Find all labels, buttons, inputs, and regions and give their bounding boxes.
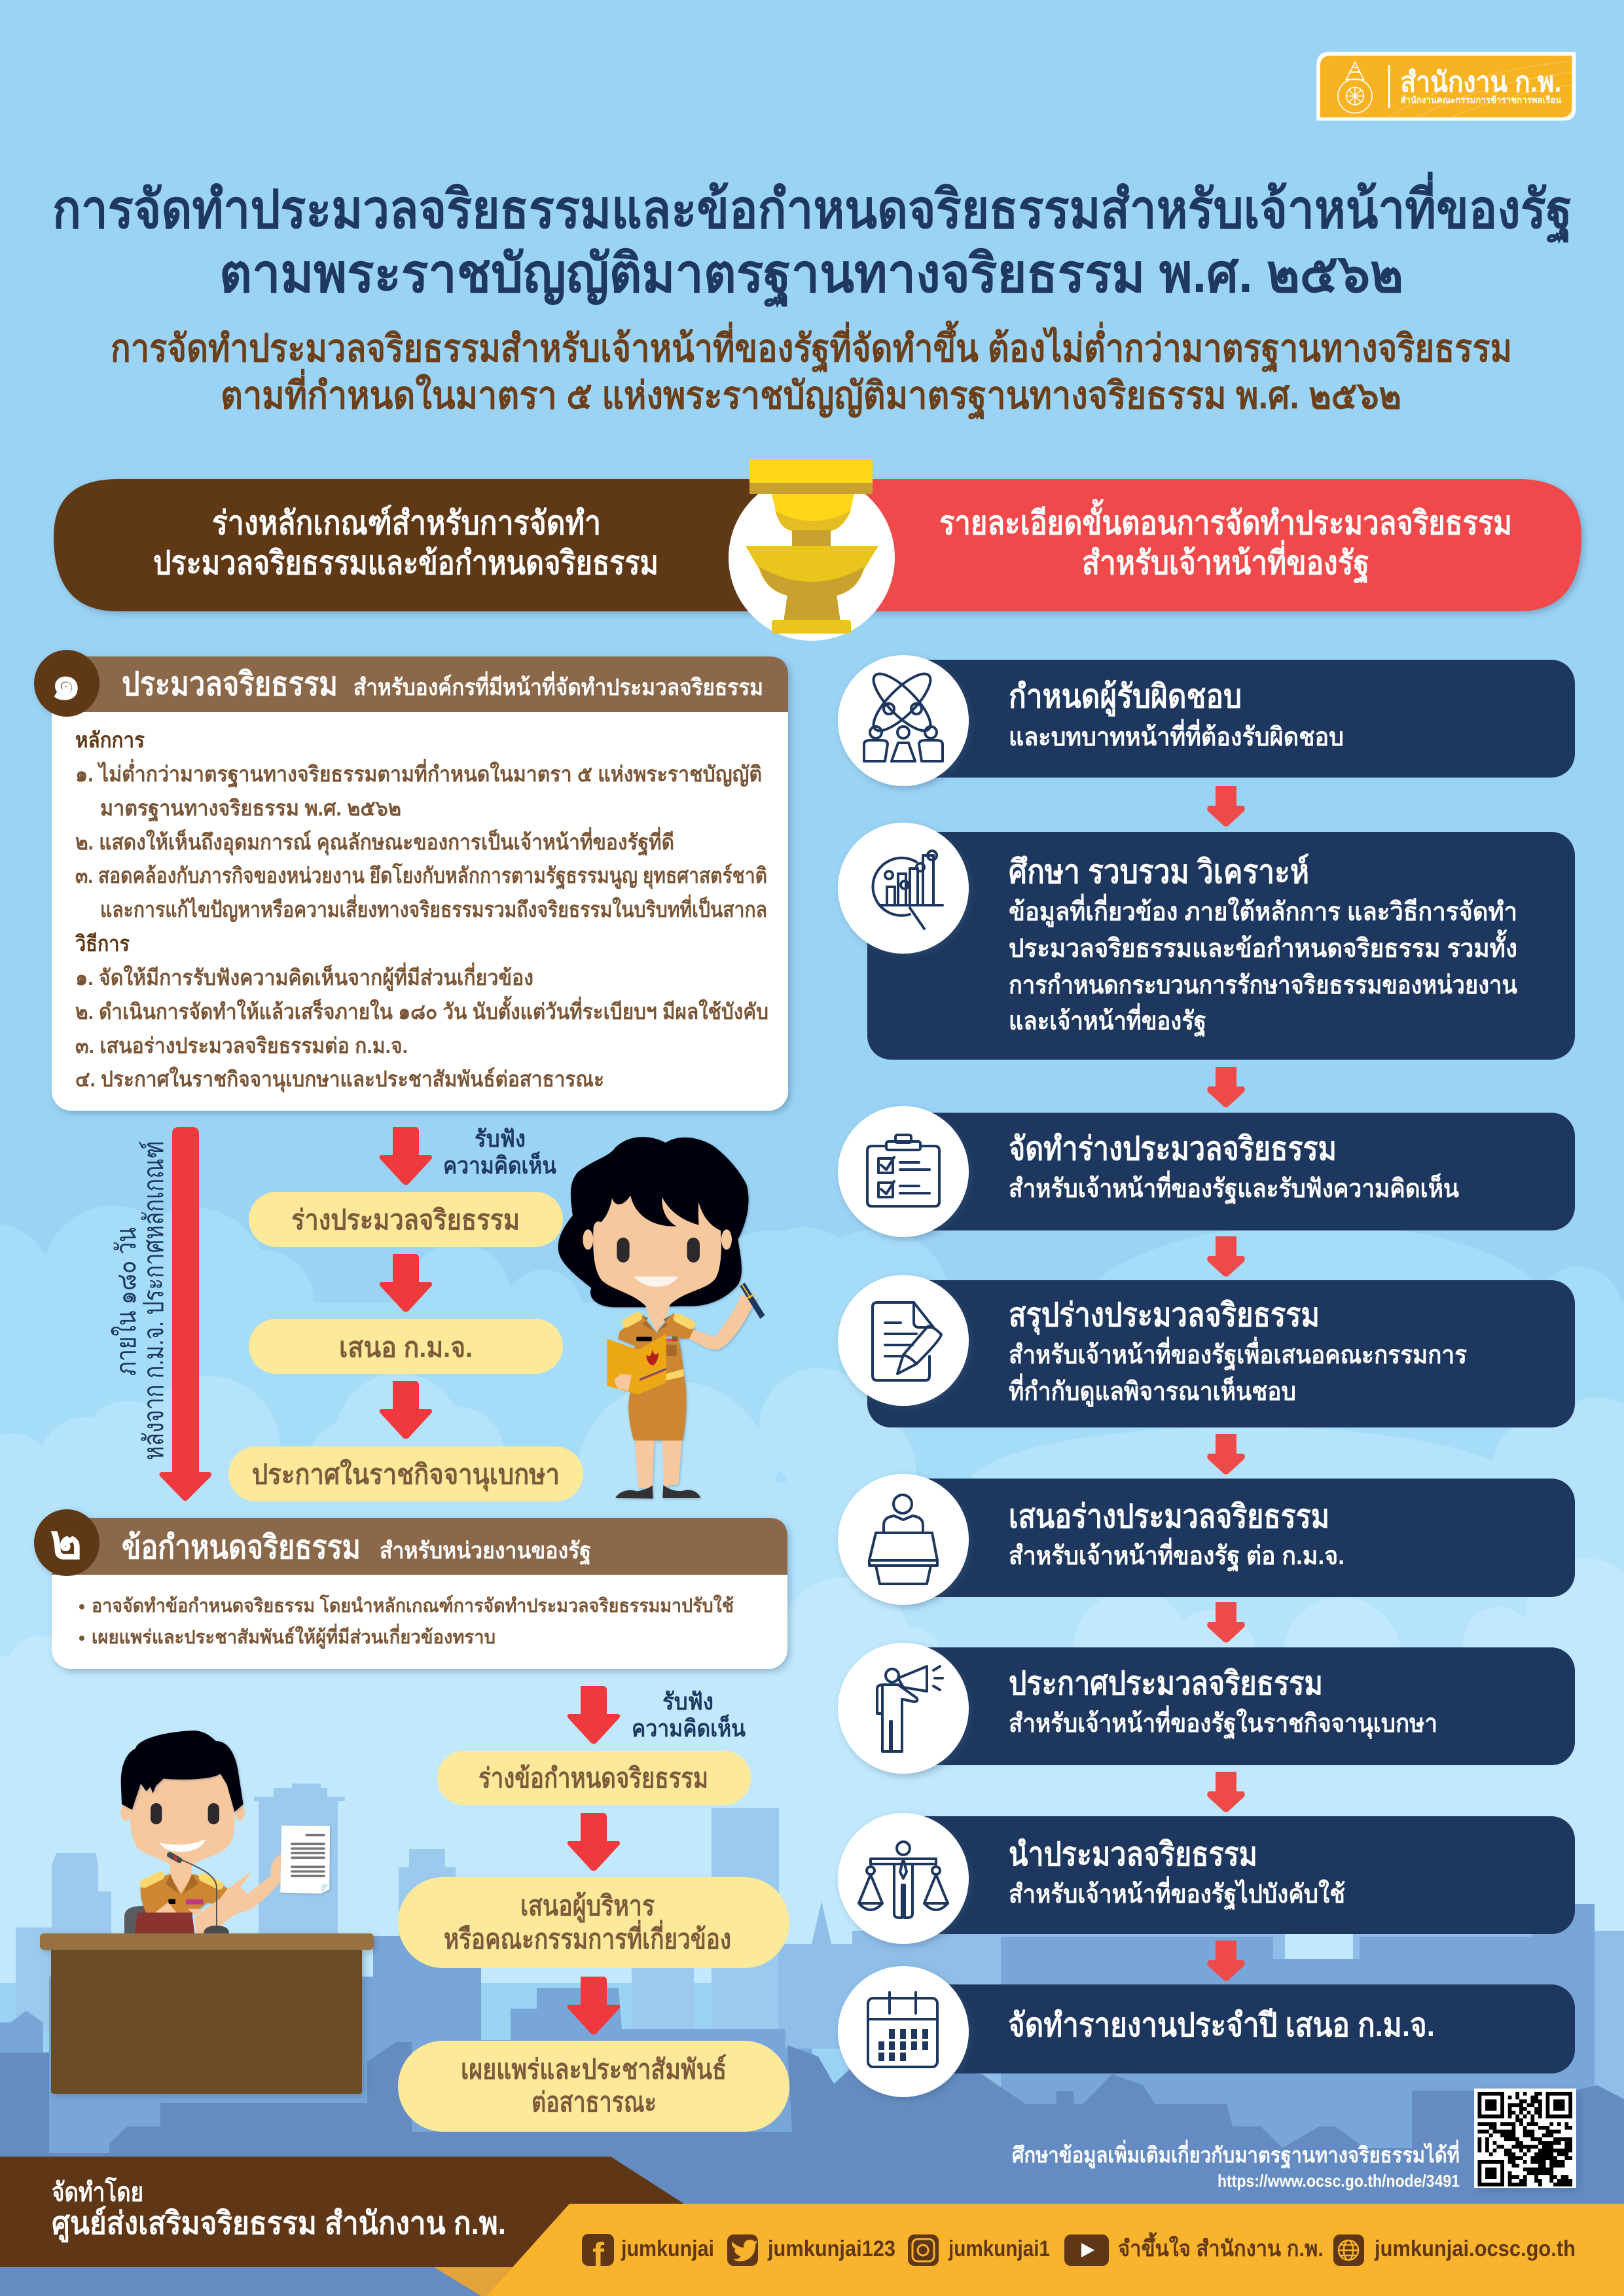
section 1 body: ๒. แสดงให้เห็นถึงอุดมการณ์ คุณลักษณะของการเป็นเจ้าหน้าที่ของรัฐที่ดี bbox=[75, 827, 674, 856]
section 1 body: หลักการ bbox=[75, 728, 145, 752]
step 3 text: จัดทำร่างประมวลจริยธรรม bbox=[1009, 1130, 1337, 1167]
flow 2 pill: draft bbox=[437, 1751, 751, 1805]
timeline vertical label: ภายใน ๑๘๐ วัน bbox=[111, 1227, 141, 1376]
step 8 text: จัดทำรายงานประจำปี เสนอ ก.ม.จ. bbox=[1008, 2007, 1435, 2043]
section 1 body: และการแก้ไขปัญหาหรือความเสี่ยงทางจริยธรรมรวมถึงจริยธรรมในบริบทที่เป็นสากล bbox=[100, 894, 767, 922]
label: public hearing 1: ความคิดเห็น bbox=[443, 1151, 556, 1179]
step 8 icon bbox=[838, 1966, 969, 2097]
section 1 number badge: ๑ bbox=[51, 655, 81, 709]
logo wordmark: สำนักงาน ก.พ. bbox=[1400, 67, 1561, 98]
flow 1 pill: draft bbox=[249, 1192, 563, 1247]
step 3 card: สำหรับเจ้าหน้าที่ของรัฐและรับฟังความคิดเห็น bbox=[1009, 1170, 1459, 1205]
timeline long arrow bbox=[159, 1127, 211, 1501]
icon: golden tray center bbox=[729, 459, 895, 641]
label: public hearing 2: รับฟัง bbox=[662, 1688, 713, 1715]
organizer text: ศูนย์ส่งเสริมจริยธรรม สำนักงาน ก.พ. bbox=[52, 2206, 506, 2243]
step 5 icon bbox=[838, 1474, 969, 1605]
step 1 text: กำหนดผู้รับผิดชอบ bbox=[1009, 678, 1242, 717]
flow 2 pill: publish: ต่อสาธารณะ bbox=[532, 2087, 657, 2117]
step 7 text: นำประมวลจริยธรรม bbox=[1009, 1836, 1257, 1873]
label: public hearing 2: ความคิดเห็น bbox=[632, 1713, 746, 1742]
flow 1 pill: gazette bbox=[228, 1446, 583, 1501]
label: public hearing 1: รับฟัง bbox=[475, 1125, 526, 1152]
step 3 card bbox=[838, 1106, 1575, 1237]
section 1 body: ๓. เสนอร่างประมวลจริยธรรมต่อ ก.ม.จ. bbox=[75, 1033, 408, 1058]
section 2 bullets: อาจจัดทำข้อกำหนดจริยธรรม โดยนำหลักเกณฑ์การจัดทำประมวลจริยธรรมมาปรับใช้ bbox=[92, 1594, 734, 1617]
organizer text: จัดทำโดย bbox=[52, 2177, 143, 2207]
section 2 bullets: เผยแพร่และประชาสัมพันธ์ให้ผู้ที่มีส่วนเกี่ยวข้องทราบ bbox=[92, 1623, 496, 1649]
step 5 text: เสนอร่างประมวลจริยธรรม bbox=[1009, 1498, 1329, 1535]
step 6 card bbox=[838, 1643, 1575, 1774]
logo OCSC bbox=[1316, 52, 1576, 120]
banner: right red bbox=[812, 479, 1581, 611]
footer: orange band bbox=[486, 2204, 1624, 2296]
arrow 1 to 2 bbox=[1207, 786, 1245, 826]
background clouds bbox=[0, 1206, 1624, 1983]
more information text: https://www.ocsc.go.th/node/3491 bbox=[1218, 2171, 1460, 2191]
step 2 card bbox=[838, 823, 1575, 1060]
subtitle bbox=[111, 321, 1512, 420]
social: website bbox=[1333, 2234, 1576, 2266]
panel: section 2 bbox=[34, 1509, 787, 1669]
illustration: woman officer bbox=[558, 1137, 763, 1499]
section 1 number badge bbox=[34, 650, 99, 717]
logo emblem bbox=[1338, 62, 1372, 113]
step 5 card bbox=[838, 1474, 1575, 1605]
label: public hearing 2 bbox=[632, 1688, 746, 1742]
flow 2 pill: executive: เสนอผู้บริหาร bbox=[520, 1890, 655, 1923]
panel: section 1 bbox=[34, 650, 788, 1111]
banner: left brown bbox=[54, 479, 812, 611]
step 4 icon bbox=[838, 1275, 969, 1406]
step 2 card: และเจ้าหน้าที่ของรัฐ bbox=[1009, 1003, 1206, 1037]
section 1 body: ๑. จัดให้มีการรับฟังความคิดเห็นจากผู้ที่มีส่วนเกี่ยวข้อง bbox=[75, 962, 533, 992]
section 1 body: ๒. ดำเนินการจัดทำให้แล้วเสร็จภายใน ๑๘๐ วัน นับตั้งแต่วันที่ระเบียบฯ มีผลใช้บังคับ bbox=[75, 996, 768, 1024]
banner left text: ร่างหลักเกณฑ์สำหรับการจัดทำ bbox=[212, 505, 601, 541]
background city skyline bbox=[0, 1784, 1624, 2296]
social: instagram: jumkunjai1 bbox=[948, 2236, 1050, 2261]
social: facebook bbox=[582, 2234, 714, 2275]
timeline vertical label: หลังจาก ก.ม.จ. ประกาศหลักเกณฑ์ bbox=[138, 1141, 169, 1460]
section 2 bullets bbox=[79, 1594, 734, 1649]
step 7 card bbox=[838, 1813, 1575, 1944]
QR code bbox=[1474, 2089, 1576, 2188]
social: facebook: jumkunjai bbox=[621, 2236, 714, 2261]
section 1 body: ๑. ไม่ต่ำกว่ามาตรฐานทางจริยธรรมตามที่กำหนดในมาตรา ๕ แห่งพระราชบัญญัติ bbox=[75, 759, 762, 788]
arrow 7 to 8 bbox=[1207, 1941, 1245, 1981]
step 6 card: สำหรับเจ้าหน้าที่ของรัฐในราชกิจจานุเบกษา bbox=[1009, 1705, 1437, 1740]
arrow 2 to 3 bbox=[1207, 1067, 1245, 1107]
flow 1 pill: propose: เสนอ ก.ม.จ. bbox=[339, 1332, 473, 1363]
social: instagram bbox=[908, 2234, 1050, 2266]
section 2 heading: ข้อกำหนดจริยธรรม bbox=[122, 1529, 361, 1566]
section 2 number badge: ๒ bbox=[50, 1515, 82, 1569]
step 2 text: ศึกษา รวบรวม วิเคราะห์ bbox=[1009, 853, 1309, 890]
timeline vertical label bbox=[111, 1141, 169, 1460]
title: ตามพระราชบัญญัติมาตรฐานทางจริยธรรม พ.ศ. ๒๕๖๒ bbox=[219, 244, 1403, 309]
step 6 text: ประกาศประมวลจริยธรรม bbox=[1009, 1665, 1323, 1702]
section 2 subheading: สำหรับหน่วยงานของรัฐ bbox=[380, 1538, 591, 1566]
step 8 card bbox=[838, 1966, 1575, 2097]
flow 1 arrows bbox=[380, 1127, 432, 1439]
banner left text: ประมวลจริยธรรมและข้อกำหนดจริยธรรม bbox=[153, 545, 659, 581]
section 1 body: มาตรฐานทางจริยธรรม พ.ศ. ๒๕๖๒ bbox=[100, 796, 401, 822]
banner right text: สำหรับเจ้าหน้าที่ของรัฐ bbox=[1082, 540, 1369, 584]
banner right text: รายละเอียดขั้นตอนการจัดทำประมวลจริยธรรม bbox=[939, 499, 1512, 541]
footer: dark orange fold bbox=[434, 2267, 513, 2296]
social: twitter: jumkunjai123 bbox=[767, 2236, 895, 2261]
flow 2 pill: executive: หรือคณะกรรมการที่เกี่ยวข้อง bbox=[444, 1920, 731, 1954]
arrow 6 to 7 bbox=[1207, 1772, 1245, 1812]
section 1 heading: ประมวลจริยธรรม bbox=[122, 666, 338, 702]
step 7 card: สำหรับเจ้าหน้าที่ของรัฐไปบังคับใช้ bbox=[1009, 1876, 1345, 1910]
arrow 3 to 4 bbox=[1207, 1236, 1245, 1276]
banner left text bbox=[153, 505, 659, 581]
step 4 text: สรุปร่างประมวลจริยธรรม bbox=[1009, 1297, 1320, 1335]
flow 2 arrows bbox=[568, 1686, 620, 2034]
desk bbox=[40, 1933, 374, 2094]
social: youtube bbox=[1064, 2232, 1324, 2266]
step 1 icon bbox=[838, 655, 969, 786]
step 3 icon bbox=[838, 1106, 969, 1237]
step 1 card: และบทบาทหน้าที่ที่ต้องรับผิดชอบ bbox=[1009, 719, 1344, 751]
section 1 body: ๓. สอดคล้องกับภารกิจของหน่วยงาน ยึดโยงกับหลักการตามรัฐธรรมนูญ ยุทธศาสตร์ชาติ bbox=[75, 863, 767, 889]
footer: brown organizer band bbox=[0, 2157, 684, 2267]
section 2 header bbox=[52, 1518, 787, 1575]
step 4 card bbox=[838, 1275, 1575, 1427]
flow 1 pill: draft: ร่างประมวลจริยธรรม bbox=[291, 1204, 520, 1235]
flow 1 pill: gazette: ประกาศในราชกิจจานุเบกษา bbox=[252, 1458, 560, 1492]
flow 2 pill: publish: เผยแพร่และประชาสัมพันธ์ bbox=[461, 2054, 727, 2085]
arrow 4 to 5 bbox=[1207, 1434, 1245, 1474]
step 7 icon bbox=[838, 1813, 969, 1944]
flow 2 pill: draft: ร่างข้อกำหนดจริยธรรม bbox=[478, 1763, 708, 1793]
social: website: jumkunjai.ocsc.go.th bbox=[1374, 2236, 1576, 2261]
section 1 header bbox=[52, 656, 788, 712]
section 1 body: ๔. ประกาศในราชกิจจานุเบกษาและประชาสัมพันธ์ต่อสาธารณะ bbox=[75, 1066, 604, 1093]
step 4 card: ที่กำกับดูแลพิจารณาเห็นชอบ bbox=[1009, 1373, 1296, 1407]
section 1 body bbox=[75, 728, 768, 1093]
more information text bbox=[1012, 2140, 1460, 2191]
step 2 card: ประมวลจริยธรรมและข้อกำหนดจริยธรรม รวมทั้ง bbox=[1009, 929, 1517, 963]
step 1 card bbox=[838, 655, 1575, 786]
step 5 card: สำหรับเจ้าหน้าที่ของรัฐ ต่อ ก.ม.จ. bbox=[1009, 1537, 1344, 1572]
step 2 card: ข้อมูลที่เกี่ยวข้อง ภายใต้หลักการ และวิธีการจัดทำ bbox=[1009, 893, 1517, 927]
title bbox=[52, 171, 1572, 309]
banner right text bbox=[939, 499, 1512, 584]
illustration: man at desk bbox=[40, 1731, 374, 2094]
social: youtube: จำขึ้นใจ สำนักงาน ก.พ. bbox=[1118, 2232, 1324, 2261]
social: facebook: f bbox=[592, 2236, 605, 2275]
step 2 icon bbox=[838, 823, 969, 954]
more information text: ศึกษาข้อมูลเพิ่มเติมเกี่ยวกับมาตรฐานทางจริยธรรมได้ที่ bbox=[1012, 2140, 1460, 2169]
step 2 card: การกำหนดกระบวนการรักษาจริยธรรมของหน่วยงาน bbox=[1009, 971, 1517, 999]
label: public hearing 1 bbox=[443, 1125, 556, 1179]
step 4 card: สำหรับเจ้าหน้าที่ของรัฐเพื่อเสนอคณะกรรมการ bbox=[1009, 1336, 1467, 1371]
arrow 5 to 6 bbox=[1207, 1602, 1245, 1643]
flow 2 pill: publish bbox=[398, 2041, 789, 2132]
flow 1 pill: propose bbox=[249, 1319, 563, 1374]
section 1 subheading: สำหรับองค์กรที่มีหน้าที่จัดทำประมวลจริยธรรม bbox=[353, 671, 763, 700]
section 2 number badge bbox=[34, 1509, 99, 1576]
logo OCSC: สำนักงานคณะกรรมการข้าราชการพลเรือน bbox=[1400, 95, 1562, 105]
subtitle: ตามที่กำหนดในมาตรา ๕ แห่งพระราชบัญญัติมาตรฐานทางจริยธรรม พ.ศ. ๒๕๖๒ bbox=[221, 368, 1401, 420]
step 6 icon bbox=[838, 1643, 969, 1774]
organizer text bbox=[52, 2177, 506, 2243]
social: twitter bbox=[727, 2234, 895, 2266]
flow 2 pill: executive bbox=[398, 1877, 789, 1968]
section 1 body: วิธีการ bbox=[75, 931, 130, 956]
